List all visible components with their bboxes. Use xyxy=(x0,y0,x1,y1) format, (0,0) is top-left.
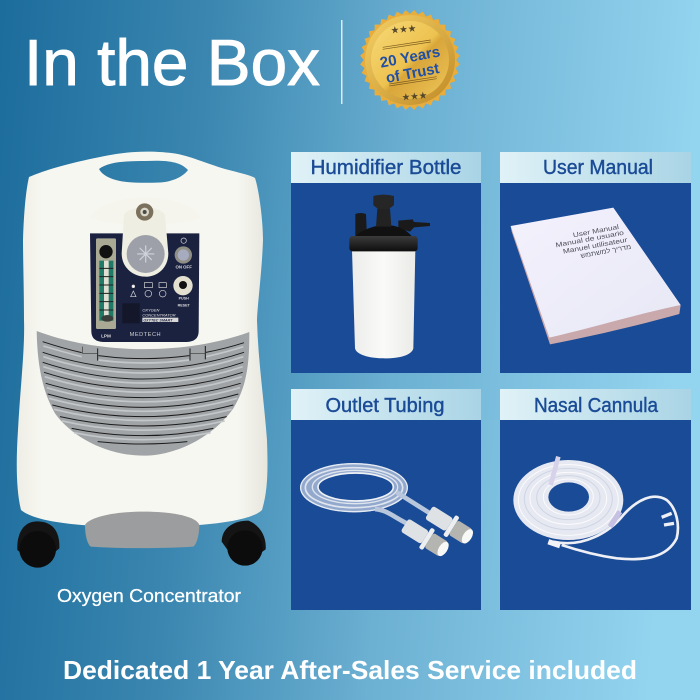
badge: 20 Years of Trust: of Trust xyxy=(384,60,441,87)
flowmeter: LPM xyxy=(101,333,111,338)
heading: Outlet Tubing: Outlet Tubing xyxy=(326,395,444,417)
connector xyxy=(423,502,477,549)
product name xyxy=(142,308,178,322)
product name: OXYGEN xyxy=(142,308,160,313)
power switch: ON OFF xyxy=(175,264,192,269)
panel: outlet tubing xyxy=(291,389,481,610)
concentrator body xyxy=(17,152,267,527)
heading: Outlet Tubing xyxy=(291,389,481,420)
badge: 20 Years of Trust: 20 Years xyxy=(379,43,442,72)
heading: User Manual xyxy=(500,152,691,183)
heading: Humidifier Bottle xyxy=(291,152,481,183)
manual cover text: Manual de usuario xyxy=(555,230,625,249)
connector xyxy=(398,515,453,561)
caption: Oxygen Concentrator: Oxygen Concentrator xyxy=(57,586,241,606)
icon: nasal cannula xyxy=(513,457,678,559)
manual cover text xyxy=(555,224,632,260)
icon: user manual booklet xyxy=(511,208,681,344)
title: In the Box xyxy=(24,26,320,99)
outlet housing: ✳ xyxy=(136,242,155,268)
badge: 20 Years of Trust: ★★★ xyxy=(402,91,428,102)
heading: User Manual: User Manual xyxy=(543,157,653,179)
panel: nasal cannula xyxy=(500,389,691,610)
indicators xyxy=(131,283,166,297)
manual cover text: מדריך למשתמש xyxy=(580,243,632,260)
badge: 20 Years of Trust: ★★★ xyxy=(391,24,417,35)
oxygen concentrator xyxy=(17,152,267,568)
flowmeter xyxy=(96,238,116,338)
power switch xyxy=(175,238,192,269)
display window xyxy=(122,303,140,323)
ventilation grille xyxy=(37,331,249,456)
icon: left wheel xyxy=(17,521,59,568)
product name: OXYTEC SMART xyxy=(143,318,173,322)
manual cover text: User Manual xyxy=(572,224,620,239)
foot plate xyxy=(85,512,199,548)
divider xyxy=(341,20,342,104)
heading: Humidifier Bottle: Humidifier Bottle xyxy=(310,157,462,179)
reset button: PUSH xyxy=(179,296,189,300)
outlet housing xyxy=(91,197,200,277)
icon: humidifier bottle xyxy=(349,195,430,358)
manual cover text: Manuel utilisateur xyxy=(562,237,629,256)
footer: after-sales service: Dedicated 1 Year After-Sales Service included xyxy=(63,655,637,685)
control panel xyxy=(90,197,200,342)
brand logo: MEDTECH xyxy=(130,332,161,338)
heading: Nasal Cannula xyxy=(500,389,691,420)
badge: 20 Years of Trust xyxy=(360,10,460,110)
reset button xyxy=(173,276,193,308)
icon: outlet tubing xyxy=(300,463,477,561)
panel: user manual xyxy=(500,152,691,373)
icon: right wheel xyxy=(222,521,266,566)
reset button: RESET xyxy=(178,304,191,308)
panel: humidifier bottle xyxy=(291,152,481,373)
product name: CONCENTRATOR xyxy=(142,312,176,317)
heading: Nasal Cannula: Nasal Cannula xyxy=(534,395,659,417)
